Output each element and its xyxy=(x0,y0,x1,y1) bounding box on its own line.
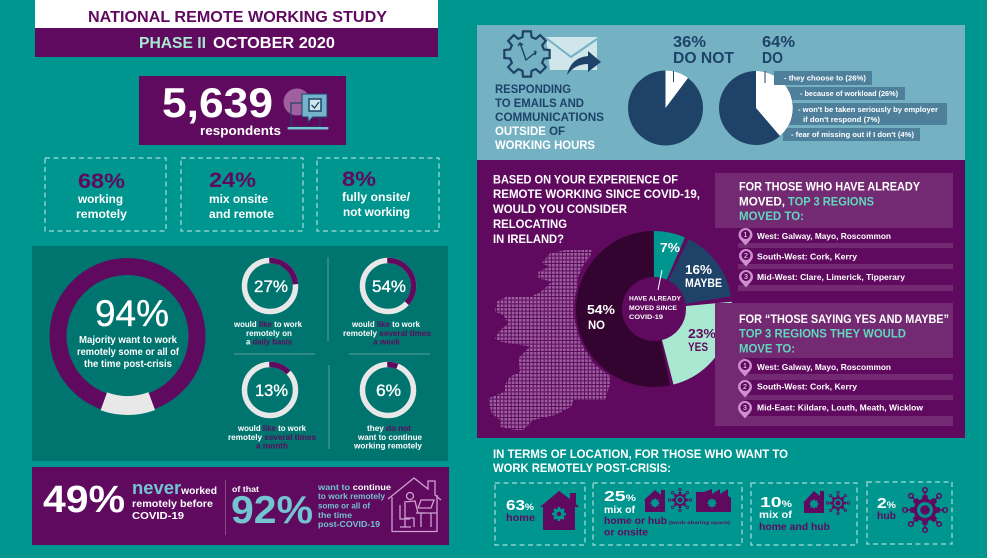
icon: hub xyxy=(903,488,947,532)
stat: 8% fully onsite: 8% xyxy=(342,168,376,191)
panel: respondents: respondents xyxy=(200,123,281,138)
panel: yes and maybe regions: 1 xyxy=(743,363,747,370)
chart: 54% several times a week: 54% xyxy=(372,278,406,296)
chart: 64% do pie: DO xyxy=(762,50,783,67)
stat: 25% mix xyxy=(593,483,742,545)
panel: never worked remotely: the time xyxy=(318,510,352,520)
stat: 25% mix: home or hub xyxy=(604,515,667,527)
stat: 68% working remotely xyxy=(45,158,166,231)
panel: already moved regions: FOR THOSE WHO HAVE ALREADY xyxy=(739,182,920,194)
panel: already moved regions: MOVED TO: xyxy=(739,211,804,223)
reasons list: - because of workload (26%) xyxy=(800,89,898,98)
panel: respondents xyxy=(139,76,346,145)
panel: never worked remotely: COVID-19 xyxy=(132,510,184,522)
icon: clock gear xyxy=(504,31,550,77)
panel: already moved regions: 1 xyxy=(744,232,748,239)
stat: 8% fully onsite: fully onsite/ xyxy=(342,190,411,204)
reasons list: - won't be taken seriously by employer xyxy=(798,105,938,114)
chart: 6% do not: want to continue xyxy=(357,432,422,442)
panel: never worked remotely: some or all of xyxy=(318,500,370,510)
chart: 6% do not: working remotely xyxy=(353,440,422,450)
stat: 2% hub: 2% xyxy=(877,495,896,512)
reasons list: - fear of missing out if I don't (4%) xyxy=(791,130,915,139)
panel: yes and maybe regions: TOP 3 REGIONS THEY WOULD xyxy=(739,328,906,340)
heading: IN IRELAND? xyxy=(493,234,564,246)
stat: 10% home and hub: home and hub xyxy=(759,521,830,533)
chart: 13% several times a month: would like to work xyxy=(237,423,306,433)
chart: 94% ring: Majority want to work xyxy=(79,334,177,346)
chart: 6% do not: 6% xyxy=(376,382,401,400)
title: NATIONAL REMOTE WORKING STUDY xyxy=(88,9,387,26)
subtitle: PHASE II xyxy=(139,35,206,52)
reason bars behind pie xyxy=(783,87,947,141)
panel: yes and maybe regions xyxy=(715,303,953,426)
heading: WORKING HOURS xyxy=(495,140,595,152)
panel: never worked remotely: want to continue xyxy=(317,482,391,492)
chart: relocation donut: COVID-19 xyxy=(629,314,663,321)
chart: relocation donut: 7% xyxy=(660,241,680,255)
stat: 10% home and hub: mix of xyxy=(759,509,793,521)
reasons list: if don't respond (7%) xyxy=(803,115,881,124)
stat: 24% mix onsite and remote: and remote xyxy=(209,207,274,221)
reasons list: - they choose to (26%) xyxy=(784,74,867,82)
chart: 54% several times a week xyxy=(343,260,431,346)
panel: yes and maybe regions: FOR “THOSE SAYING YES AND MAYBE” xyxy=(739,314,949,326)
chart: 94% ring: remotely some or all of xyxy=(77,346,179,358)
chart: 94% ring xyxy=(38,247,217,425)
heading: REMOTE WORKING SINCE COVID-19, xyxy=(493,189,700,201)
chart: relocation donut: HAVE ALREADY xyxy=(629,296,682,302)
panel: yes and maybe regions: South-West: Cork, Kerry xyxy=(757,382,857,392)
chart: 36% do not pie xyxy=(628,34,735,146)
title banner xyxy=(35,0,438,57)
chart: relocation donut xyxy=(587,241,722,364)
panel: never worked remotely: 92% xyxy=(231,489,313,532)
panel: responding outside working hours xyxy=(477,25,965,160)
chart: 27% daily: would like to work xyxy=(233,319,302,329)
panel: preferences xyxy=(32,246,448,461)
stat: 63% home: home xyxy=(506,513,535,524)
chart: 6% do not: they do not xyxy=(367,423,411,433)
panel: never worked remotely: neverworked xyxy=(132,478,217,498)
chart: 27% daily xyxy=(233,260,302,346)
panel: already moved regions: Mid-West: Clare, Limerick, Tipperary xyxy=(757,272,905,282)
icon: person working in house xyxy=(388,478,441,532)
heading: location xyxy=(493,449,788,475)
panel: never worked remotely: of that xyxy=(232,484,259,494)
panel: never worked remotely: to work remotely xyxy=(318,491,385,501)
panel: already moved regions: TOP 3 REGIONS xyxy=(788,196,874,208)
chart: 54% several times a week: would like to work xyxy=(351,319,420,329)
panel: already moved regions xyxy=(715,173,953,291)
chart: 94% ring: 94% xyxy=(95,293,169,334)
heading: TO EMAILS AND xyxy=(495,98,584,110)
chart: 6% do not xyxy=(353,364,422,450)
subtitle: OCTOBER 2020 xyxy=(213,35,335,52)
stat: 68% working remotely: working xyxy=(77,192,123,206)
stat: 10% home and hub: 10 % xyxy=(760,494,792,511)
chart: relocation donut: YES xyxy=(688,342,708,354)
stat: 25% mix: mix of xyxy=(604,504,636,516)
stat: 10% home and hub xyxy=(751,483,857,545)
panel: already moved regions: 3 xyxy=(744,274,748,281)
chart: 54% several times a week: a week xyxy=(373,336,400,346)
chart: 13% several times a month xyxy=(228,364,316,450)
chart: relocation donut: MOVED SINCE xyxy=(629,305,678,312)
chart: 54% several times a week: remotely several times xyxy=(343,328,431,338)
stat: 24% mix onsite and remote: 24% xyxy=(209,169,256,192)
chart: 13% several times a month: a month xyxy=(256,440,288,450)
heading: BASED ON YOUR EXPERIENCE OF xyxy=(493,174,678,186)
panel: already moved regions: South-West: Cork, Kerry xyxy=(757,252,857,262)
panel: already moved regions: MOVED, xyxy=(739,196,785,208)
icon: home xyxy=(540,491,579,530)
panel: respondents: 5,639 xyxy=(162,79,273,126)
chart: 94% ring: the time post-crisis xyxy=(84,358,172,370)
stat: 25% mix: 25 % xyxy=(604,488,636,505)
chart: 27% daily: remotely on xyxy=(246,328,292,338)
icon: home and hub xyxy=(803,491,850,515)
panel: never worked remotely xyxy=(32,467,449,545)
subtitle xyxy=(139,35,335,52)
panel: yes and maybe regions: West: Galway, Mayo, Roscommon xyxy=(757,362,891,372)
heading: RESPONDING xyxy=(495,84,571,96)
chart: relocation donut: 23% xyxy=(688,327,716,341)
panel: yes and maybe regions: 3 xyxy=(743,405,747,412)
stat: 25% mix: or onsite xyxy=(604,526,648,538)
chart: 36% do not pie: 36% xyxy=(673,34,706,51)
stat: 68% working remotely: 68% xyxy=(78,170,125,193)
stat: 24% mix onsite and remote: mix onsite xyxy=(209,192,268,206)
stat: 68% working remotely: remotely xyxy=(76,207,127,221)
icon: laptop with chat bubble xyxy=(284,88,328,130)
stat: 8% fully onsite: not working xyxy=(343,205,410,219)
panel: never worked remotely: post-COVID-19 xyxy=(318,519,380,529)
panel: yes and maybe regions: 2 xyxy=(743,384,747,391)
chart: 64% do pie xyxy=(719,34,795,145)
chart: 13% several times a month: remotely several times xyxy=(228,432,316,442)
stat: 8% fully onsite xyxy=(317,158,439,231)
heading xyxy=(495,84,604,152)
icon: envelope xyxy=(546,37,597,70)
chart: relocation donut: NO xyxy=(588,320,605,332)
chart: relocation donut: MAYBE xyxy=(685,278,722,290)
chart: 13% several times a month: 13% xyxy=(255,382,288,400)
icon: arrow xyxy=(567,51,601,75)
chart: 27% daily: a daily basis xyxy=(246,336,292,346)
chart: 27% daily: 27% xyxy=(254,278,288,296)
stat: 63% home xyxy=(495,483,585,545)
stat: 63% home: 63% xyxy=(506,497,534,514)
heading: COMMUNICATIONS xyxy=(495,112,604,124)
chart: relocation donut: 16% xyxy=(685,263,712,277)
stat: 2% hub: hub xyxy=(877,511,896,522)
panel: already moved regions: 2 xyxy=(744,253,748,260)
chart: 64% do pie: 64% xyxy=(762,34,795,51)
heading: WOULD YOU CONSIDER xyxy=(493,204,628,216)
panel: yes and maybe regions: MOVE TO: xyxy=(739,344,795,356)
panel: relocating xyxy=(477,160,965,438)
heading xyxy=(493,174,700,246)
panel: already moved regions: West: Galway, Mayo, Roscommon xyxy=(757,231,891,241)
panel: never worked remotely: 49% xyxy=(43,479,125,521)
icon: home, hub and factory xyxy=(644,488,731,512)
heading: location: WORK REMOTELY POST-CRISIS: xyxy=(493,463,671,475)
chart: 36% do not pie: DO NOT xyxy=(673,50,735,67)
stat: 24% mix onsite and remote xyxy=(181,158,303,231)
panel: yes and maybe regions: Mid-East: Kildare, Louth, Meath, Wicklow xyxy=(757,402,923,412)
map: Ireland dots xyxy=(486,247,612,430)
stat: 25% mix: (work-sharing space) xyxy=(669,520,731,525)
panel: never worked remotely: remotely before xyxy=(132,498,213,510)
stat: 2% hub xyxy=(867,482,952,544)
reasons list xyxy=(774,71,938,139)
chart: relocation donut: 54% xyxy=(587,303,615,317)
heading: OUTSIDE OF xyxy=(495,126,565,138)
heading: location: IN TERMS OF LOCATION, FOR THOSE WHO WANT TO xyxy=(493,449,788,461)
heading: RELOCATING xyxy=(493,219,567,231)
